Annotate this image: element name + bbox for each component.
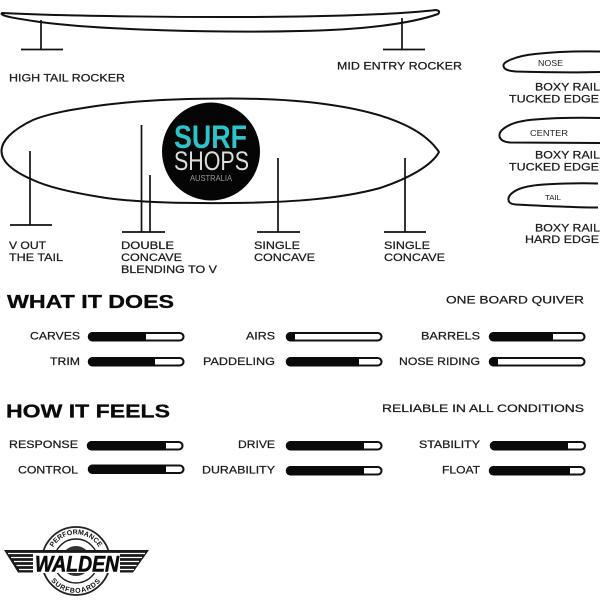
- rating: barrels: [421, 330, 584, 342]
- rocker profile board: [2, 10, 439, 50]
- rating: response: [9, 439, 182, 451]
- rating: control: [18, 464, 184, 476]
- rating: carves: CARVES: [30, 330, 80, 342]
- label: mid entry rocker: MID ENTRY ROCKER: [337, 60, 462, 72]
- rating: control: CONTROL: [18, 464, 78, 476]
- logo: Walden Performance Surfboards: WALDEN: [35, 552, 120, 576]
- label: V out the tail: THE TAIL: [9, 252, 63, 264]
- rating: nose riding: [399, 356, 584, 368]
- subheading: one board quiver: ONE BOARD QUIVER: [446, 294, 584, 306]
- rail label: boxy rail hard edge: [525, 222, 600, 246]
- rating: stability: [419, 439, 585, 451]
- label: double concave blending to V: DOUBLE: [121, 240, 174, 252]
- label: single concave centre: CONCAVE: [254, 252, 315, 264]
- rail label: boxy rail hard edge: BOXY RAIL: [535, 222, 600, 234]
- rating: durability: [202, 464, 382, 476]
- board outline with concave markers: [2, 98, 439, 232]
- logo: Surf Shops Australia: AUSTRALIA: [190, 173, 232, 183]
- rating: trim: [50, 356, 184, 368]
- rating: durability: DURABILITY: [202, 464, 276, 476]
- rail label: boxy rail tucked edge: BOXY RAIL: [535, 82, 600, 94]
- rating: nose riding: NOSE RIDING: [399, 356, 480, 368]
- rating: airs: [246, 330, 382, 342]
- logo: Surf Shops Australia: SHOPS: [174, 146, 249, 176]
- rating: carves: [30, 330, 184, 342]
- logo: Surf Shops Australia: SURF: [174, 119, 247, 155]
- rating: float: [442, 464, 584, 476]
- rail label: boxy rail tucked edge: TUCKED EDGE: [509, 94, 599, 106]
- rail label: boxy rail tucked edge center: [509, 150, 600, 174]
- rating: stability: STABILITY: [419, 439, 481, 451]
- label: V out the tail: [9, 240, 63, 264]
- rating: paddeling: PADDELING: [203, 356, 275, 368]
- label: single concave centre: SINGLE: [254, 240, 300, 252]
- rail: tail: [508, 183, 598, 208]
- rating: barrels: BARRELS: [421, 330, 480, 342]
- rating: float: FLOAT: [442, 464, 480, 476]
- rating: drive: [238, 439, 382, 451]
- logo: Walden Performance Surfboards: PERFORMANCE: [49, 530, 103, 548]
- label: double concave blending to V: CONCAVE: [121, 252, 182, 264]
- label: single concave nose: CONCAVE: [384, 252, 445, 264]
- rating: airs: AIRS: [246, 330, 275, 342]
- label: double concave blending to V: [121, 240, 218, 276]
- heading: how it feels: HOW IT FEELS: [6, 402, 170, 422]
- rail: center: CENTER: [530, 129, 568, 138]
- label: single concave nose: [384, 240, 445, 264]
- logo: Walden Performance Surfboards: SURFBOARDS: [52, 578, 100, 593]
- label: high tail rocker: HIGH TAIL ROCKER: [9, 72, 125, 84]
- rail: nose: NOSE: [538, 59, 563, 68]
- rating: paddeling: [203, 356, 382, 368]
- label: single concave centre: [254, 240, 315, 264]
- rating: response: RESPONSE: [9, 439, 78, 451]
- logo: Walden Performance Surfboards: [4, 526, 149, 596]
- rail label: boxy rail hard edge: HARD EDGE: [525, 234, 599, 246]
- rating: drive: DRIVE: [238, 439, 275, 451]
- logo: Surf Shops Australia: [162, 102, 260, 200]
- label: single concave nose: SINGLE: [384, 240, 430, 252]
- label: double concave blending to V: BLENDING TO V: [121, 264, 218, 276]
- subheading: reliable in all conditions: RELIABLE IN ALL CONDITIONS: [382, 403, 584, 415]
- rail: nose: [503, 51, 600, 72]
- rail label: boxy rail tucked edge: [509, 82, 600, 106]
- rail: center: [499, 118, 600, 143]
- rating: trim: TRIM: [50, 356, 80, 368]
- heading: what it does: WHAT IT DOES: [7, 292, 174, 312]
- rail label: boxy rail tucked edge center: BOXY RAIL: [535, 150, 600, 162]
- rail: tail: TAIL: [545, 193, 561, 202]
- rail label: boxy rail tucked edge center: TUCKED EDGE: [509, 162, 599, 174]
- label: V out the tail: V OUT: [9, 240, 46, 252]
